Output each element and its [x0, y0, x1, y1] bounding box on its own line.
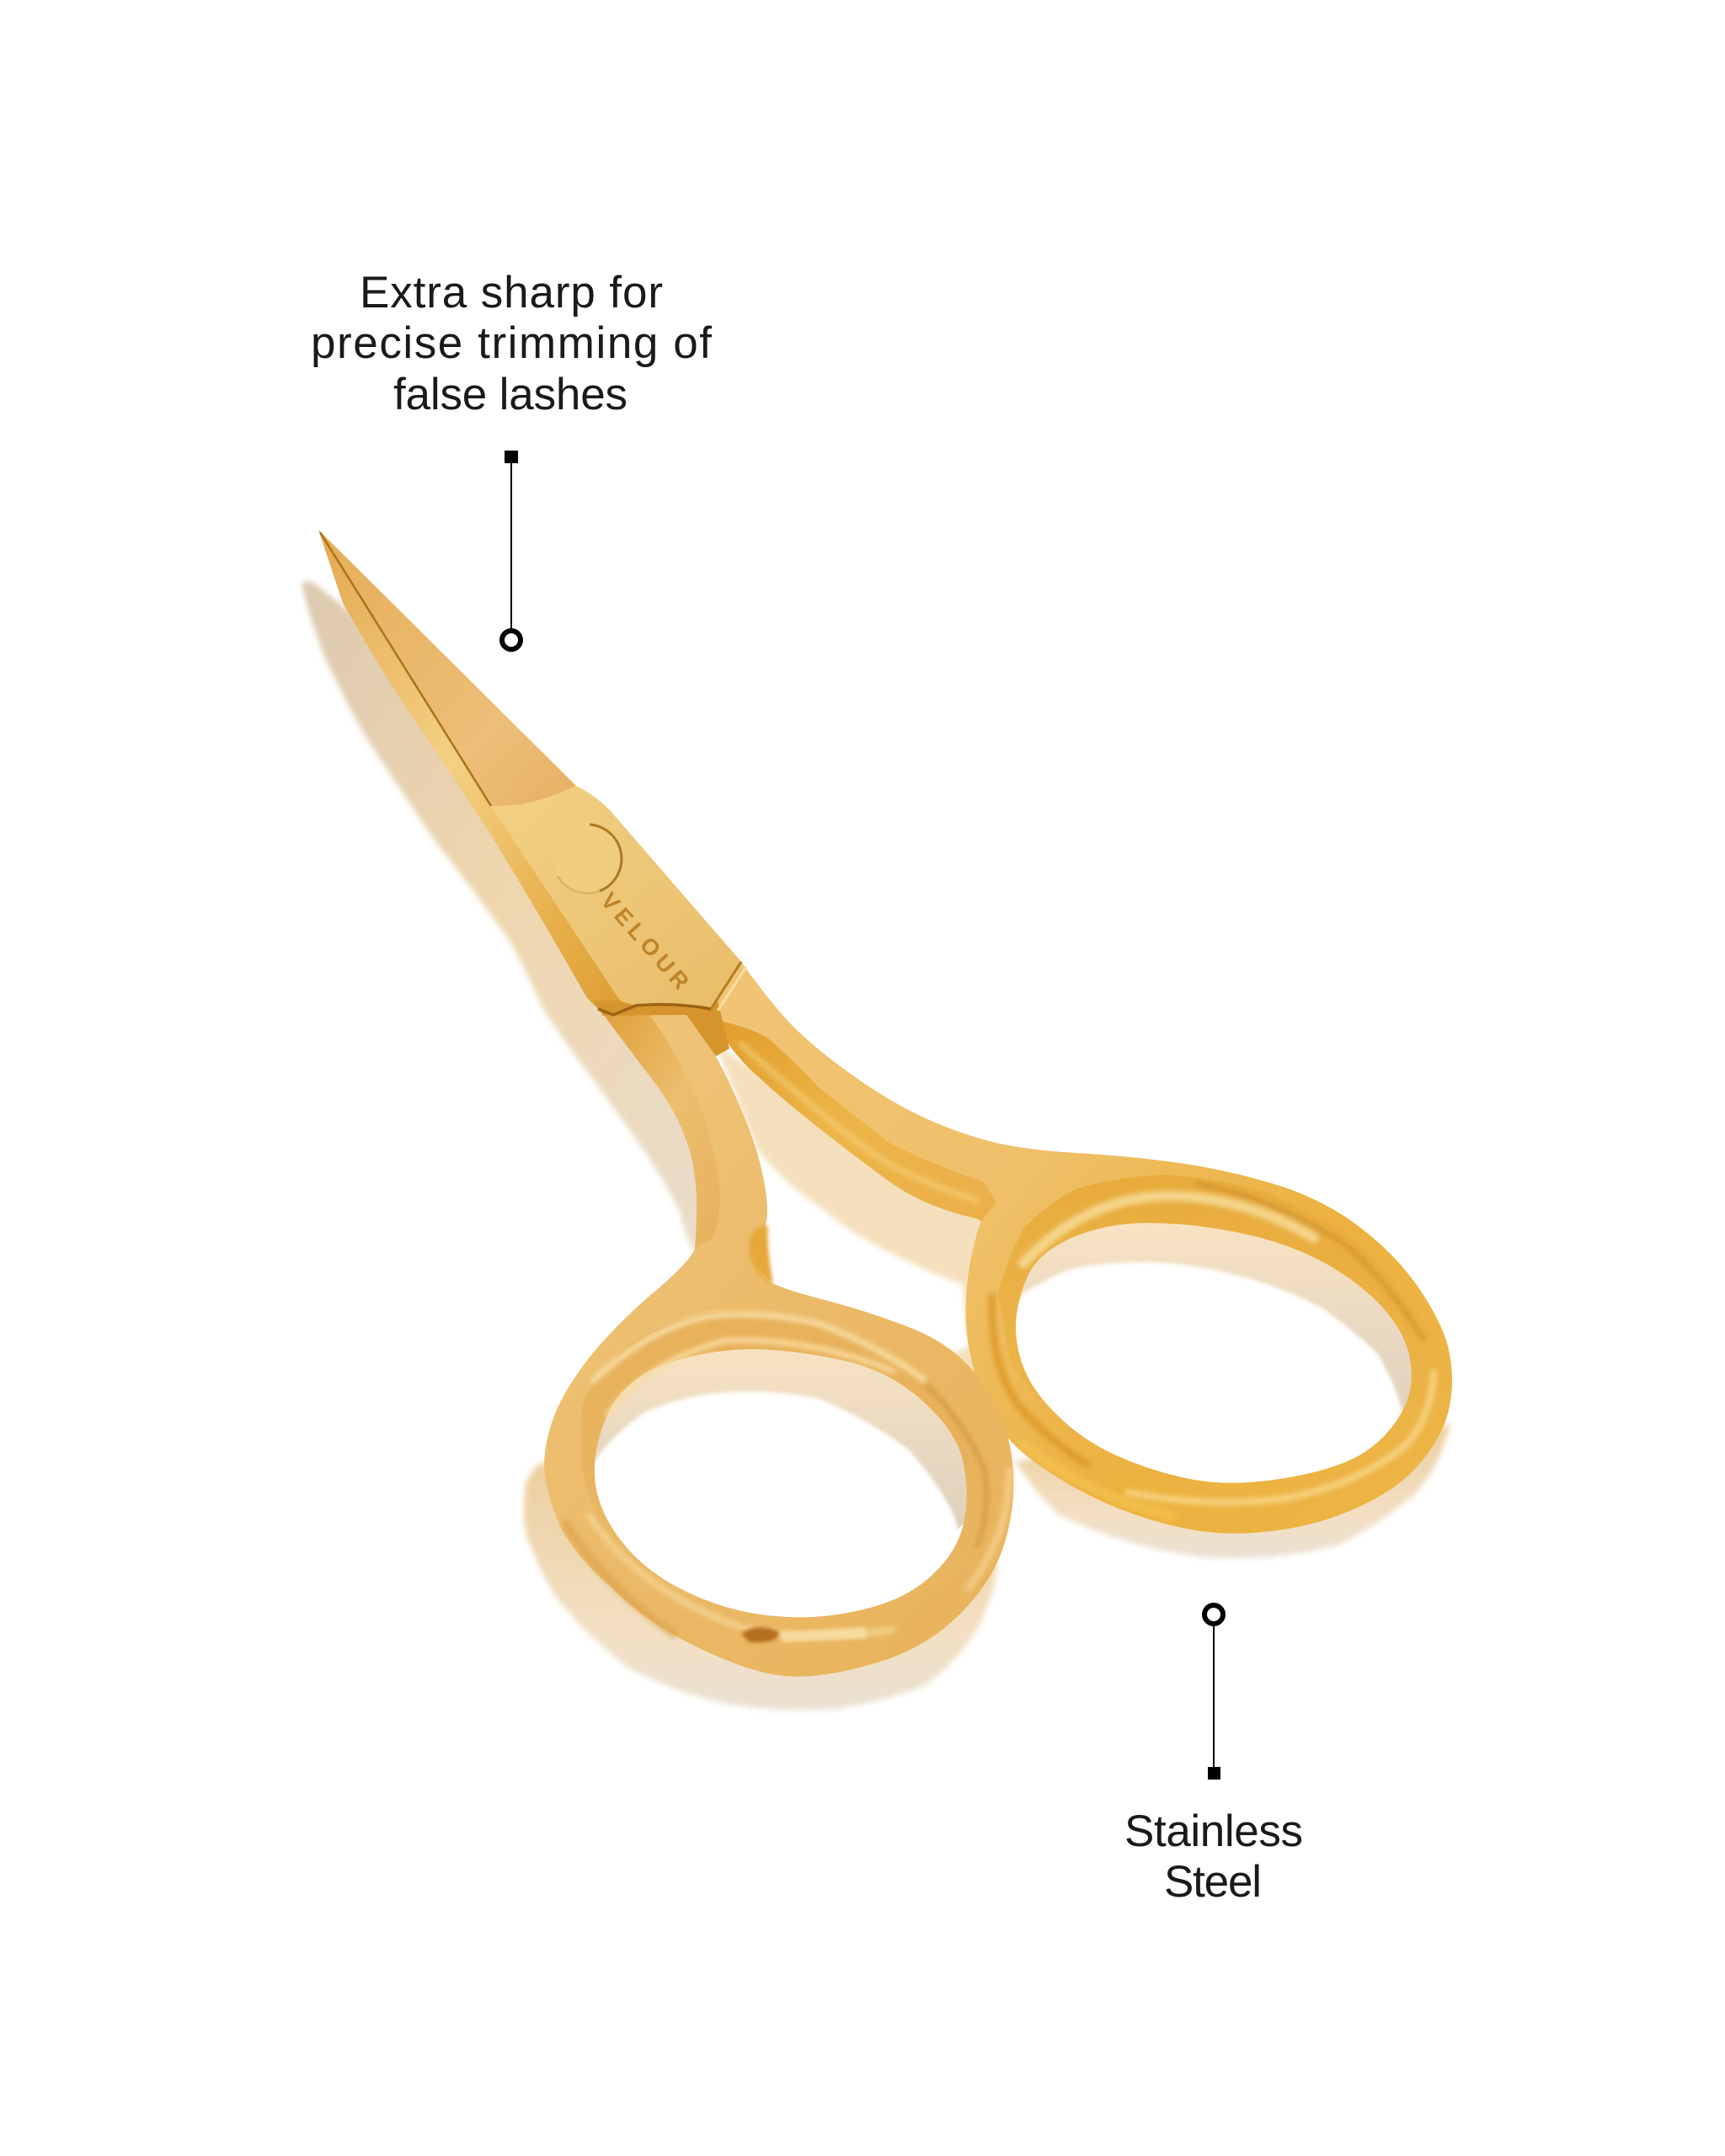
shadow inside left finger loop — [591, 1346, 971, 1558]
callout: stainless steel — [1124, 1605, 1303, 1907]
plate seam — [598, 962, 746, 1015]
lower blade edge — [318, 530, 636, 1015]
right shank groove highlight — [741, 1044, 977, 1200]
callout text: extra sharp: Extra sharp for — [360, 268, 663, 318]
left handle body — [544, 1011, 1013, 1677]
right shank groove — [711, 1009, 996, 1221]
blade crease line — [320, 532, 491, 806]
pivot screw — [553, 825, 622, 894]
left shank outer band — [603, 1014, 719, 1248]
callout text: extra sharp: precise trimming of — [311, 318, 712, 368]
cast shadow of scissors — [302, 581, 1450, 1710]
right loop inner wall — [998, 1175, 1447, 1499]
right handle body — [711, 962, 1452, 1534]
right loop rim highlights — [992, 1183, 1434, 1516]
callout: extra sharp blades — [311, 268, 712, 649]
callout text: extra sharp: false lashes — [393, 370, 628, 419]
white opening right loop — [1007, 1262, 1402, 1499]
callout text: stainless steel — [1124, 1806, 1303, 1907]
upper blade face — [318, 530, 576, 806]
callout text: stainless steel: Steel — [1164, 1857, 1262, 1907]
callout marker: top leader line — [502, 451, 521, 649]
right blade and handle — [711, 962, 1452, 1534]
callout marker: bottom leader line — [1204, 1605, 1223, 1780]
left loop specular streak — [741, 1627, 866, 1642]
scissors illustration — [302, 530, 1452, 1710]
left blade and handle — [318, 530, 1013, 1677]
shank junction highlight — [749, 1225, 773, 1284]
shadow inside right finger loop — [1016, 1219, 1417, 1465]
engraved brand name: VELOUR — [595, 888, 694, 995]
callout text: stainless steel: Stainless — [1124, 1806, 1303, 1856]
pivot shadow gap under plate — [594, 1001, 729, 1056]
left loop inner wall — [581, 1311, 990, 1625]
pivot plate — [491, 786, 741, 1009]
callout text: extra sharp — [311, 268, 712, 419]
left loop rim highlights — [566, 1315, 1009, 1636]
white opening left loop — [588, 1391, 964, 1630]
